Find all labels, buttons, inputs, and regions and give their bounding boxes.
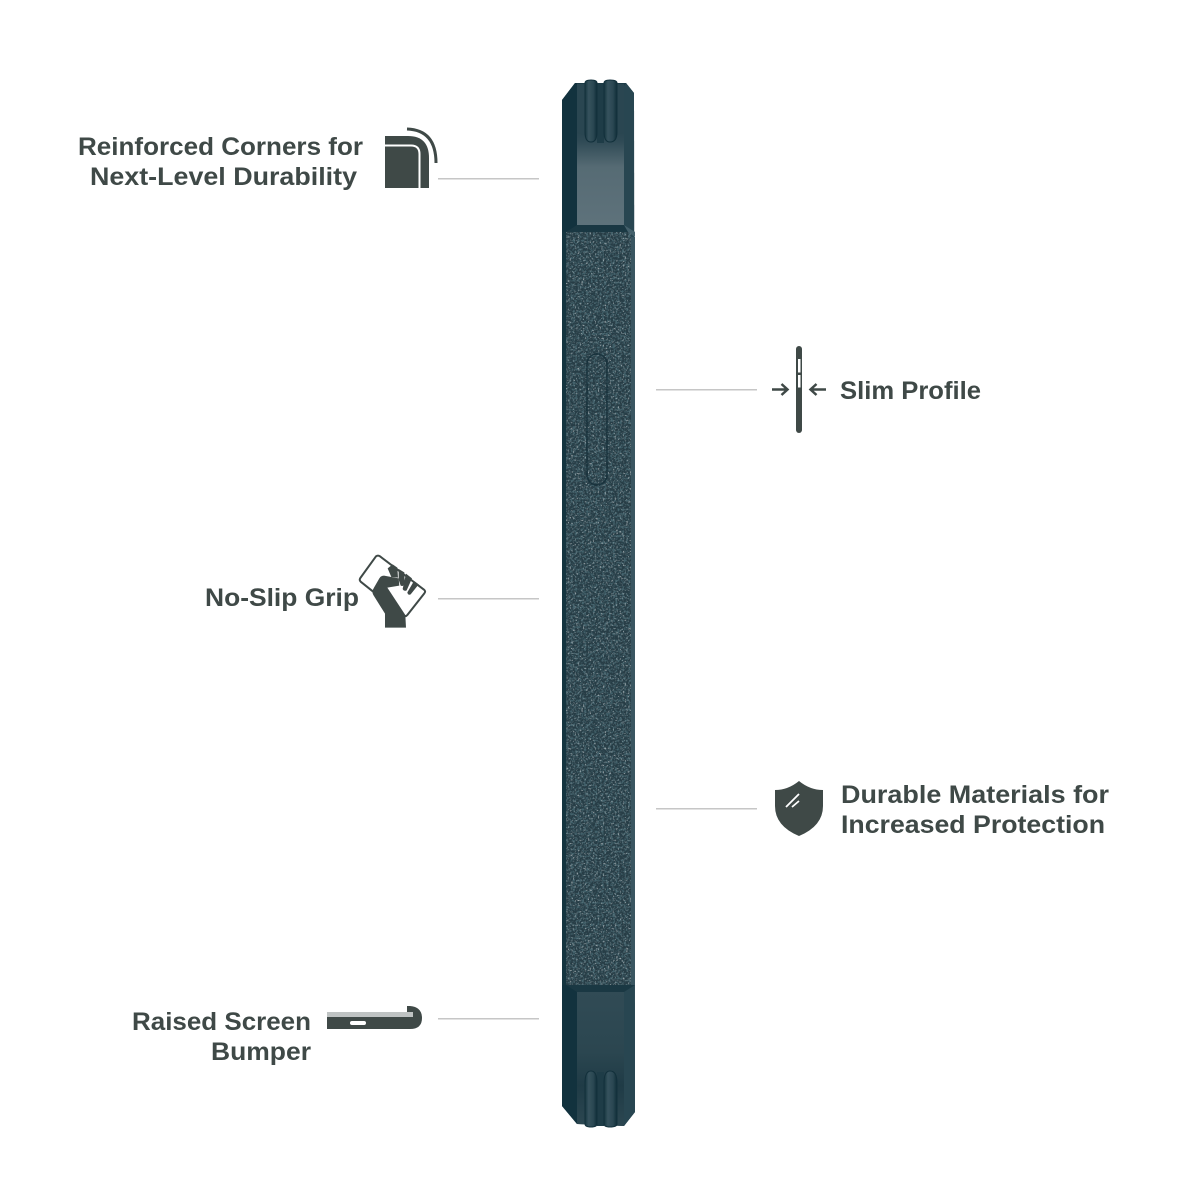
upper ridges — [577, 80, 624, 143]
lower ridges — [585, 1071, 617, 1127]
text: raised screen bumper: Bumper — [211, 1038, 311, 1066]
text: durable materials: Increased Protection — [841, 811, 1105, 839]
text: durable materials: Durable Materials for — [841, 781, 1109, 809]
right edge — [624, 83, 635, 1126]
icon: screen bumper — [327, 1006, 422, 1029]
leader line: corners — [438, 178, 539, 180]
textured grip area — [562, 232, 635, 985]
phone case side view — [562, 80, 635, 1127]
text: raised screen bumper — [132, 1008, 311, 1066]
case body — [562, 83, 635, 1126]
icon: shield — [775, 781, 823, 836]
lower corner panel — [566, 985, 635, 1126]
icon: hand gripping phone — [360, 556, 425, 628]
leader line: grip — [438, 598, 539, 600]
text: reinforced corners: Next-Level Durability — [90, 163, 357, 191]
text: raised screen bumper: Raised Screen — [132, 1008, 311, 1036]
text: durable materials — [841, 781, 1109, 839]
text: reinforced corners: Reinforced Corners for — [78, 133, 363, 161]
text: no-slip grip: No-Slip Grip — [205, 584, 359, 612]
text: slim profile: Slim Profile — [840, 377, 981, 405]
icon: slim profile — [772, 346, 826, 433]
icon: reinforced corner — [385, 129, 436, 188]
text: reinforced corners — [78, 133, 363, 191]
leader line: slim profile — [656, 389, 757, 390]
upper corner panel — [566, 120, 635, 237]
leader line: materials — [656, 808, 757, 810]
leader line: bumper — [438, 1018, 539, 1020]
left edge shade — [562, 83, 577, 1124]
side button outline — [587, 354, 607, 485]
